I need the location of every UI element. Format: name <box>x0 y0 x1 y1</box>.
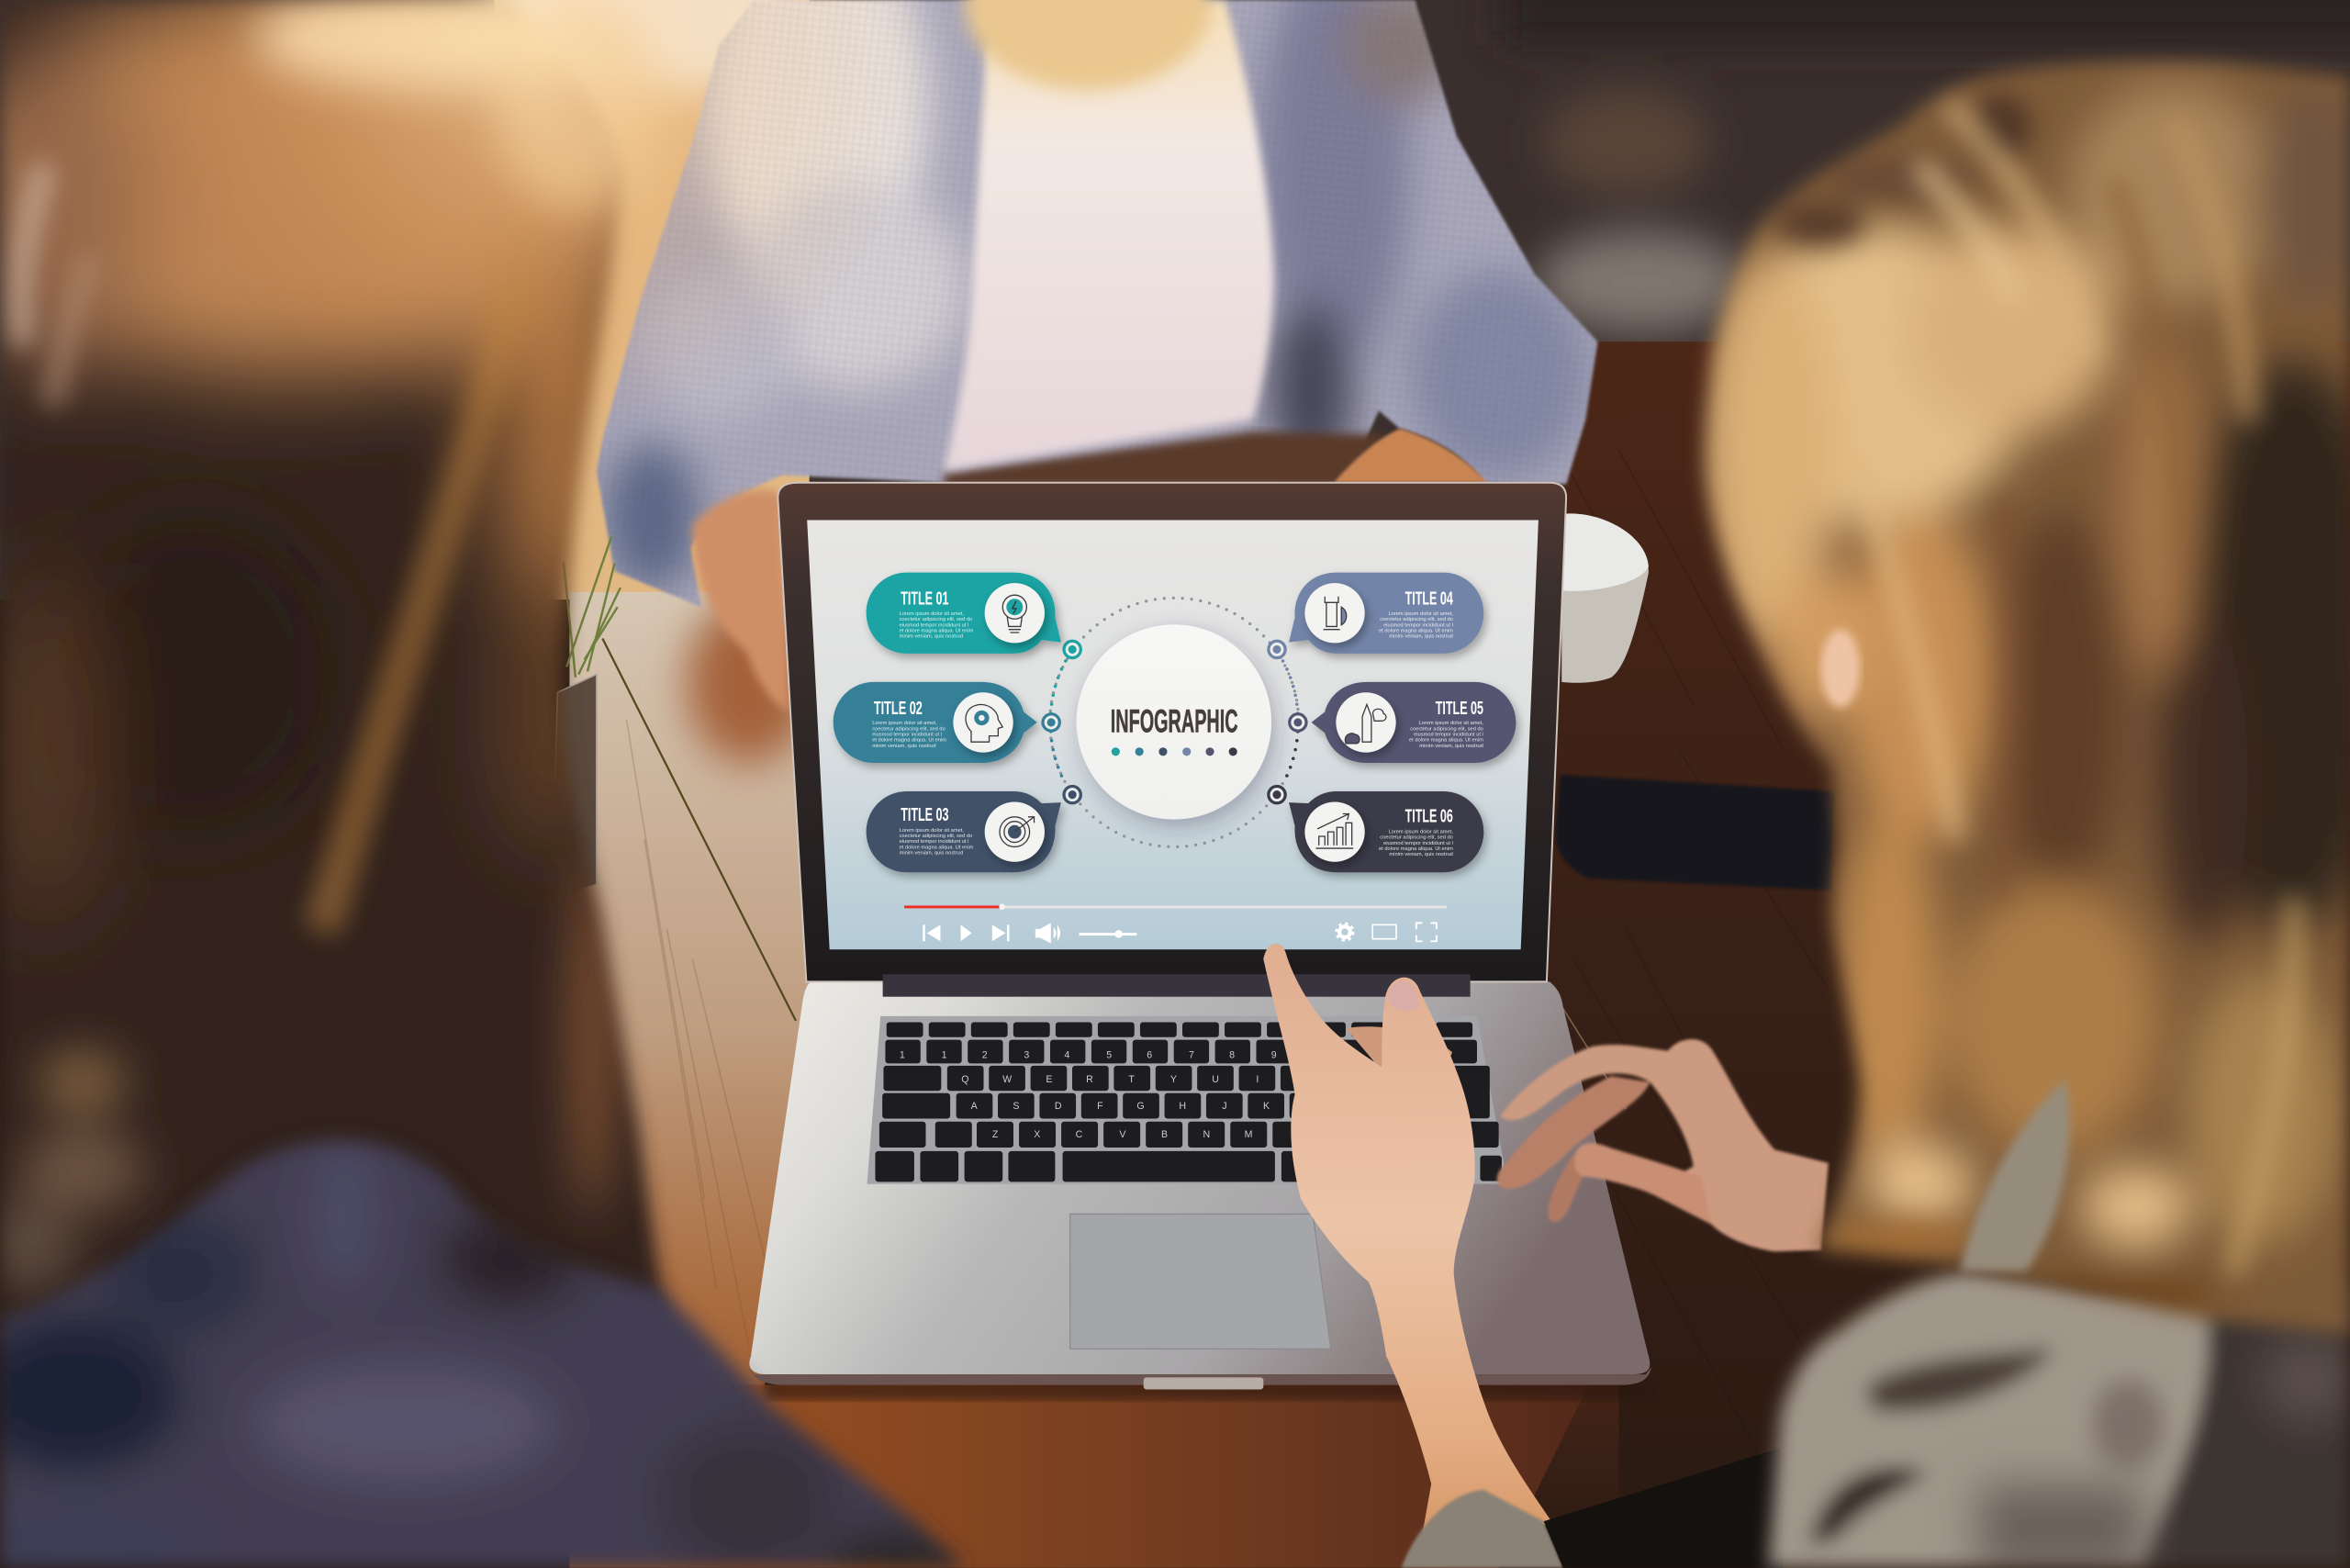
keyboard well <box>867 1016 1507 1184</box>
icon: light bulb <box>1002 595 1026 633</box>
right woman's jacket <box>1753 1259 2350 1568</box>
panel: title 03: et dolore magna aliqua. Ut enim <box>900 845 974 850</box>
panel: title 05: TITLE 05 <box>1436 699 1483 719</box>
heading: INFOGRAPHIC <box>1111 703 1238 740</box>
table <box>569 342 2350 1568</box>
panel: title 04: coectetur adipiscing elit, sed do <box>1380 617 1453 622</box>
panel: title 05: Lorem ipsum dolor sit amet, <box>1418 721 1483 726</box>
icon: next <box>992 924 1010 941</box>
key legends: D <box>1055 1101 1062 1112</box>
coffee cup <box>1561 513 1649 683</box>
key legends: W <box>1002 1074 1012 1085</box>
lid bezel <box>778 483 1566 981</box>
second finger <box>1497 1076 1651 1189</box>
key legends: E <box>1046 1074 1052 1085</box>
key legends: V <box>1119 1129 1126 1140</box>
panel: title 02: eiusmod tempor incididunt ut l <box>872 732 942 737</box>
panel: title 06 <box>1289 791 1483 872</box>
key legends: M <box>1245 1129 1252 1140</box>
man's torso in plaid shirt <box>585 0 1634 630</box>
key legends: B <box>1161 1129 1168 1140</box>
dark floor corner <box>1544 1448 1784 1568</box>
key legends: X <box>1034 1129 1040 1140</box>
panel: title 03: Lorem ipsum dolor sit amet, <box>900 828 964 834</box>
smartphone <box>1556 775 1834 890</box>
panel: title 04: minim veniam, quis nostrud <box>1389 634 1453 640</box>
panel: title 04: eiusmod tempor incididunt ut l <box>1383 622 1453 628</box>
key legends: J <box>1222 1101 1227 1112</box>
soft halo over hair edge <box>495 0 659 210</box>
laptop <box>749 483 1651 1389</box>
right hand <box>1497 1039 1829 1251</box>
thumb <box>1574 1143 1711 1225</box>
key legends <box>900 1050 1277 1140</box>
panel: title 02: TITLE 02 <box>874 699 923 719</box>
key legends: 8 <box>1229 1050 1235 1061</box>
panel: title 01: TITLE 01 <box>901 589 948 610</box>
third finger <box>1548 1154 1583 1222</box>
key legends: 5 <box>1106 1050 1112 1061</box>
panel: title 04: TITLE 04 <box>1405 589 1453 610</box>
man's lap <box>945 431 1386 487</box>
panel: title 02: coectetur adipiscing elit, sed do <box>872 726 946 732</box>
icon: fullscreen <box>1416 923 1437 941</box>
panel: title 02: minim veniam, quis nostrud <box>872 744 936 749</box>
key legends: Z <box>992 1129 999 1140</box>
key legends: K <box>1263 1101 1270 1112</box>
panel: title 05: minim veniam, quis nostrud <box>1419 744 1483 749</box>
key legends: H <box>1179 1101 1186 1112</box>
laptop base <box>749 981 1650 1374</box>
keys <box>875 1022 1502 1182</box>
key legends: 6 <box>1147 1050 1152 1061</box>
panel: title 03: TITLE 03 <box>901 805 948 825</box>
video player controls <box>904 903 1447 943</box>
dotted ring: coloured arcs <box>1050 661 1298 784</box>
dotted ring: grey arcs <box>1050 598 1299 846</box>
plant and pot <box>552 536 621 900</box>
central disc <box>1077 624 1271 820</box>
screen <box>807 521 1539 949</box>
panel: title 03: coectetur adipiscing elit, sed do <box>900 834 972 839</box>
panel: title 04: et dolore magna aliqua. Ut enim <box>1379 628 1453 633</box>
panel: title 01: et dolore magna aliqua. Ut enim <box>900 628 974 633</box>
panel: title 01: Lorem ipsum dolor sit amet, <box>900 611 964 617</box>
icon: rocket and clouds <box>1345 704 1386 744</box>
panel: title 06: minim veniam, quis nostrud <box>1389 852 1453 857</box>
panel: title 02 <box>834 682 1037 763</box>
panel: title 03: eiusmod tempor incididunt ut l <box>900 839 968 845</box>
progress track <box>904 905 1447 908</box>
sleeve on forearm <box>1402 1490 1563 1568</box>
panel: title 04 <box>1289 573 1483 654</box>
panel: title 01: coectetur adipiscing elit, sed do <box>900 617 972 622</box>
pointing hand <box>1263 944 1559 1568</box>
fingernail <box>1388 980 1419 1011</box>
t-shirt <box>945 0 1274 471</box>
panel: title 06: eiusmod tempor incididunt ut l <box>1383 841 1453 846</box>
left woman's sweater <box>0 1109 990 1568</box>
panel: title 05: coectetur adipiscing elit, sed do <box>1410 726 1483 732</box>
progress knob <box>999 903 1005 910</box>
sunlight glow <box>150 0 990 450</box>
man's left hand <box>692 489 789 712</box>
icon: previous <box>923 924 940 941</box>
panel: title 01: minim veniam, quis nostrud <box>900 634 963 640</box>
key legends: S <box>1013 1101 1019 1112</box>
panel: title 01: eiusmod tempor incididunt ut l <box>900 622 968 628</box>
panel: title 02: et dolore magna aliqua. Ut enim <box>872 738 946 744</box>
key legends: U <box>1212 1074 1219 1085</box>
key legends: R <box>1086 1074 1093 1085</box>
panel: title 03: minim veniam, quis nostrud <box>900 851 963 857</box>
key legends: N <box>1203 1129 1210 1140</box>
panel: title 01 <box>867 573 1061 654</box>
panel: title 05: eiusmod tempor incididunt ut l <box>1414 732 1483 737</box>
panel: title 05: et dolore magna aliqua. Ut enim <box>1409 738 1483 744</box>
key legends: C <box>1076 1129 1083 1140</box>
key legends: G <box>1136 1101 1145 1112</box>
key legends: T <box>1128 1074 1135 1085</box>
collar <box>1961 1080 2070 1271</box>
index finger and back of hand <box>1500 1039 1829 1251</box>
trackpad <box>1070 1214 1331 1349</box>
key legends: Q <box>961 1074 969 1085</box>
volume slider <box>1080 930 1136 938</box>
key legends: 7 <box>1189 1050 1194 1061</box>
panel: title 02: Lorem ipsum dolor sit amet, <box>872 721 937 726</box>
panel: title 06: coectetur adipiscing elit, sed do <box>1380 835 1453 841</box>
hinge bar <box>883 974 1471 997</box>
key legends: 1 <box>942 1050 947 1061</box>
key legends: F <box>1097 1101 1103 1112</box>
icon: chess rook and chart <box>1324 597 1347 630</box>
icon: window <box>1372 924 1396 939</box>
icon: speaker <box>1035 924 1060 943</box>
key legends: Y <box>1170 1074 1177 1085</box>
left woman's dark hair <box>0 0 689 1349</box>
lid opening notch <box>1144 1377 1263 1389</box>
key legends: 1 <box>900 1050 905 1061</box>
icon: target and arrow <box>1000 817 1035 846</box>
key legends: 9 <box>1271 1050 1277 1061</box>
man's right forearm <box>1334 429 1487 483</box>
key legends: I <box>1256 1074 1259 1085</box>
progress fill <box>904 905 1001 908</box>
man's chin and neck <box>965 0 1211 90</box>
laptop shadow <box>765 1379 1649 1400</box>
key legends: A <box>971 1101 979 1112</box>
right woman's blonde hair <box>1679 45 2350 1349</box>
icon: head with gear <box>966 704 1002 742</box>
panel: title 06: et dolore magna aliqua. Ut enim <box>1379 846 1453 852</box>
background room <box>0 0 2350 599</box>
key legends: 4 <box>1064 1050 1069 1061</box>
panel: title 04: Lorem ipsum dolor sit amet, <box>1388 611 1453 617</box>
heading dots <box>1112 747 1237 756</box>
base front edge <box>749 1367 1651 1385</box>
icon: play <box>961 924 972 941</box>
panel: title 06: Lorem ipsum dolor sit amet, <box>1388 829 1453 834</box>
key legends: 2 <box>982 1050 988 1061</box>
key legends: 3 <box>1024 1050 1029 1061</box>
icon: gear <box>1337 924 1353 940</box>
ring markers <box>1043 641 1306 803</box>
panel: title 03 <box>867 791 1061 872</box>
panel: title 05 <box>1312 682 1516 763</box>
right woman's cheek <box>1821 630 1860 708</box>
screen infographic <box>834 573 1516 943</box>
folded finger <box>1346 1026 1452 1067</box>
icon: rising bar chart <box>1315 814 1353 848</box>
panel: title 06: TITLE 06 <box>1405 807 1453 827</box>
